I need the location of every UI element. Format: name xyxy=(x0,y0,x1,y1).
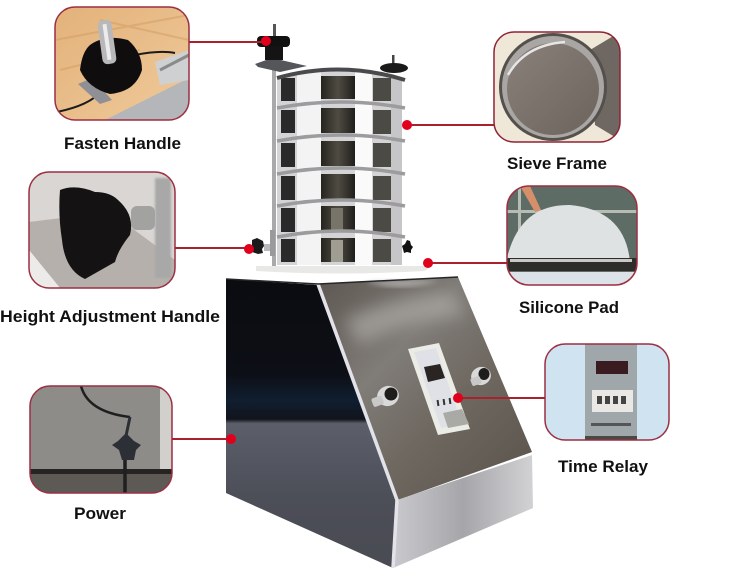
connector: time relay xyxy=(453,393,545,403)
panel: silicone pad photo xyxy=(507,186,637,285)
connector: fasten handle xyxy=(189,36,271,46)
panel: height adjustment handle photo xyxy=(29,172,175,288)
height adjustment knob xyxy=(252,230,275,256)
connector: height adjustment handle xyxy=(175,244,254,254)
connector: silicone pad xyxy=(423,258,507,268)
label: time relay: Time Relay xyxy=(558,458,649,476)
left switch xyxy=(371,383,402,409)
tier windows xyxy=(281,78,295,262)
silicone pad base plate xyxy=(256,266,428,274)
label: silicone pad: Silicone Pad xyxy=(519,299,619,317)
top fasten knob xyxy=(257,24,290,60)
panel: power plug photo xyxy=(30,386,172,493)
right knob on rim xyxy=(380,55,408,73)
label: sieve frame: Sieve Frame xyxy=(507,155,607,173)
timer control box xyxy=(408,343,470,435)
connector: power xyxy=(172,434,236,444)
cylinder body xyxy=(277,60,402,266)
left dark face xyxy=(226,279,397,568)
polished edges xyxy=(318,284,397,568)
right switch xyxy=(469,364,493,388)
panel: sieve frame photo xyxy=(494,32,620,142)
support rod xyxy=(272,64,276,266)
panel: fasten handle photo xyxy=(55,7,189,120)
machine base cabinet xyxy=(226,277,533,568)
sloped control face xyxy=(318,277,532,500)
label: height adjustment handle: Height Adjustment Handle xyxy=(0,308,220,326)
connector: sieve frame xyxy=(402,120,494,130)
panel: time relay photo xyxy=(545,344,669,440)
front lower face xyxy=(393,455,533,568)
right lower knob xyxy=(402,240,413,253)
sieve rings xyxy=(277,69,405,237)
label: fasten handle: Fasten Handle xyxy=(64,135,181,153)
top bracket xyxy=(255,58,307,72)
sieve stack xyxy=(252,24,428,274)
label: power: Power xyxy=(74,505,127,523)
